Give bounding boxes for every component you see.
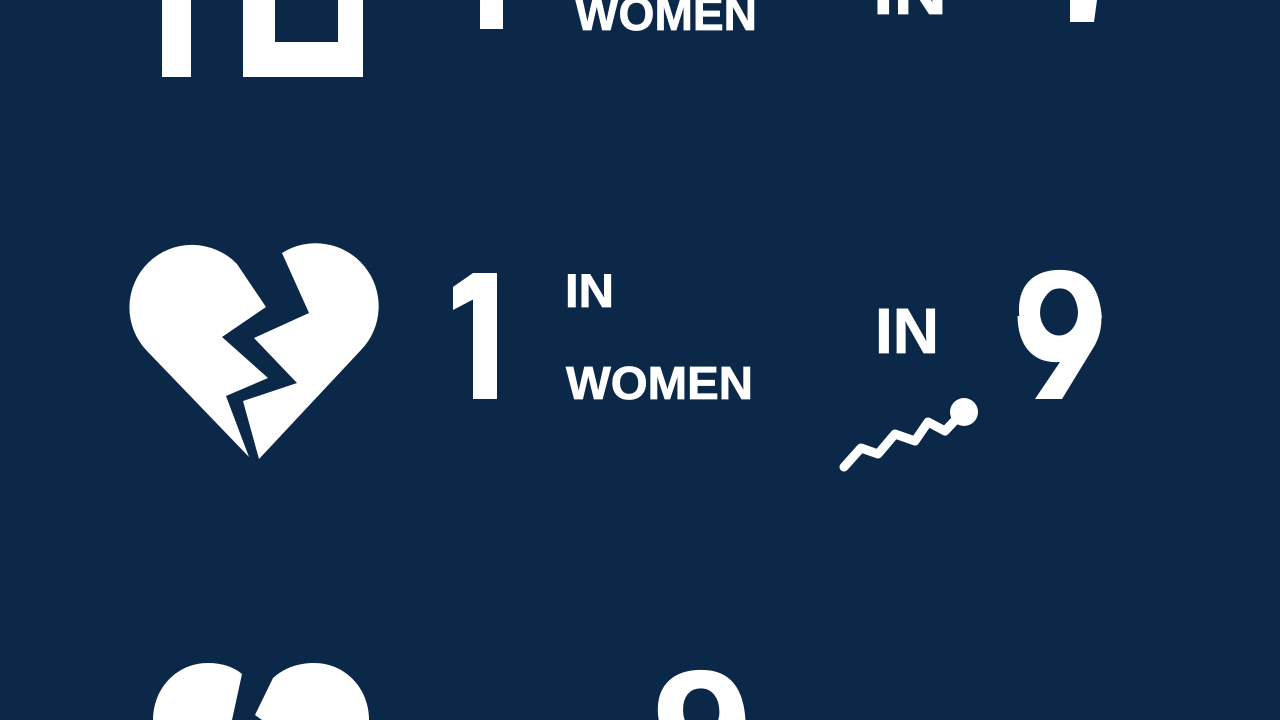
icon: cropped broken heart <box>153 663 369 720</box>
icon: broken heart <box>129 243 379 459</box>
middle row: 1 in 9 women statistic <box>129 232 1109 467</box>
label: women: WOMEN <box>566 357 753 409</box>
icon: sperm squiggle <box>844 398 978 467</box>
number: 9 <box>1018 270 1102 399</box>
number: 9: 9 <box>1013 235 1109 427</box>
label: in right: IN <box>875 295 939 367</box>
number: 1 <box>453 273 497 399</box>
icon: cropped block shape <box>162 0 363 77</box>
top row: cropped statistic <box>162 0 1097 77</box>
number fragment: top 9 tail <box>1070 0 1097 22</box>
bottom row: cropped statistic <box>153 663 746 720</box>
label: in: IN <box>565 264 614 317</box>
number: 1: 1 <box>407 232 543 438</box>
